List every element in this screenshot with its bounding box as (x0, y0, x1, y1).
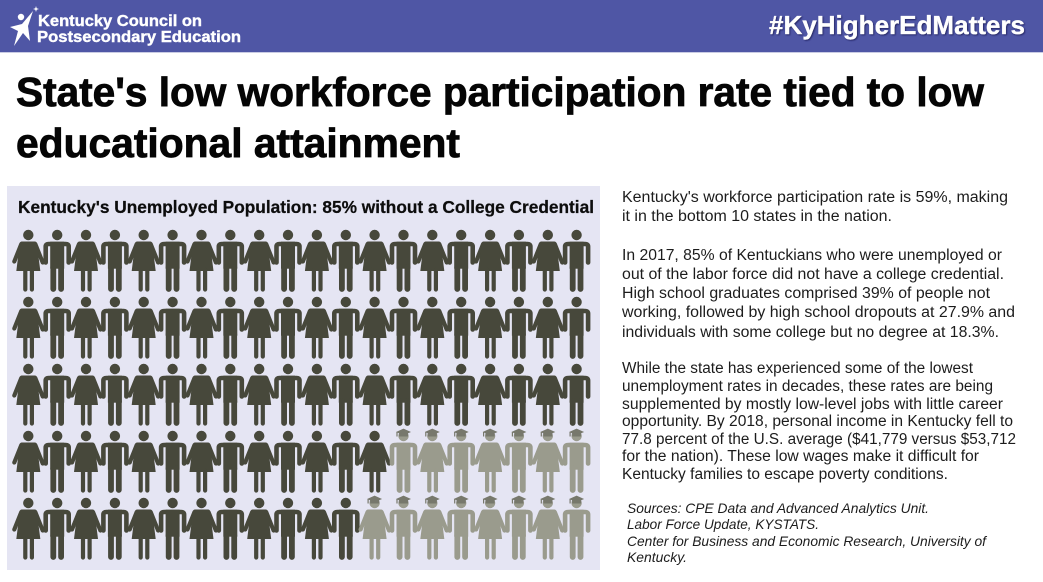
pictogram row 4 (14, 429, 588, 490)
sources: Sources: CPE Data and Advanced Analytics Unit. (627, 500, 929, 516)
text block: low wages: opportunity. By 2018, personal income in Kentucky fell to (622, 413, 1013, 430)
hashtag: #KyHigherEdMatters (769, 10, 1025, 40)
sources: Center for Business and Economic Research, University of (627, 533, 988, 549)
text block: workforce participation: it in the bottom 10 states in the nation. (622, 208, 892, 225)
chart heading: Kentucky's Unemployed Population: 85% without a College Credential (18, 197, 594, 217)
pictogram row 1 (14, 230, 588, 290)
pictogram row 2 (14, 297, 588, 356)
text block: low wages: for the nation). These low wages make it difficult for (622, 448, 979, 465)
title: State's low workforce participation rate tied to low (16, 69, 984, 115)
panel: pictogram (7, 186, 600, 570)
pictogram row 3 (14, 364, 588, 424)
sources: Kentucky. (627, 549, 687, 565)
text block: 2017 unemployed: In 2017, 85% of Kentuckians who were unemployed or (622, 247, 1002, 264)
icon: logo star figure (10, 6, 39, 46)
text block: 2017 unemployed: individuals with some college but no degree at 18.3%. (622, 324, 999, 341)
text block: low wages: While the state has experienced some of the lowest (622, 360, 974, 377)
title: educational attainment (16, 120, 460, 166)
title (16, 69, 984, 166)
text block: low wages: unemployment rates in decades, these rates are being (622, 378, 993, 395)
logo text: Kentucky Council on (38, 13, 202, 30)
pictogram row 5 (14, 496, 588, 558)
text block: 2017 unemployed: out of the labor force did not have a college credential. (622, 266, 1004, 283)
text block: low wages: supplemented by mostly low-level jobs with little career (622, 396, 1003, 413)
sources: Labor Force Update, KYSTATS. (627, 516, 819, 532)
logo text (37, 13, 241, 46)
text block: low wages (622, 360, 1016, 483)
sources (627, 500, 988, 565)
header band (0, 0, 1043, 53)
text block: 2017 unemployed: working, followed by high school dropouts at 27.9% and (621, 304, 1015, 321)
text block: 2017 unemployed: High school graduates comprised 39% of people not (622, 285, 991, 302)
logo text: Postsecondary Education (37, 29, 241, 46)
text block: low wages: 77.8 percent of the U.S. average ($41,779 versus $53,712 (622, 431, 1016, 448)
text block: workforce participation: Kentucky's workforce participation rate is 59%, making (622, 189, 1008, 206)
text block: low wages: Kentucky families to escape poverty conditions. (622, 466, 948, 483)
text block: 2017 unemployed (621, 247, 1015, 341)
text block: workforce participation (622, 189, 1008, 225)
